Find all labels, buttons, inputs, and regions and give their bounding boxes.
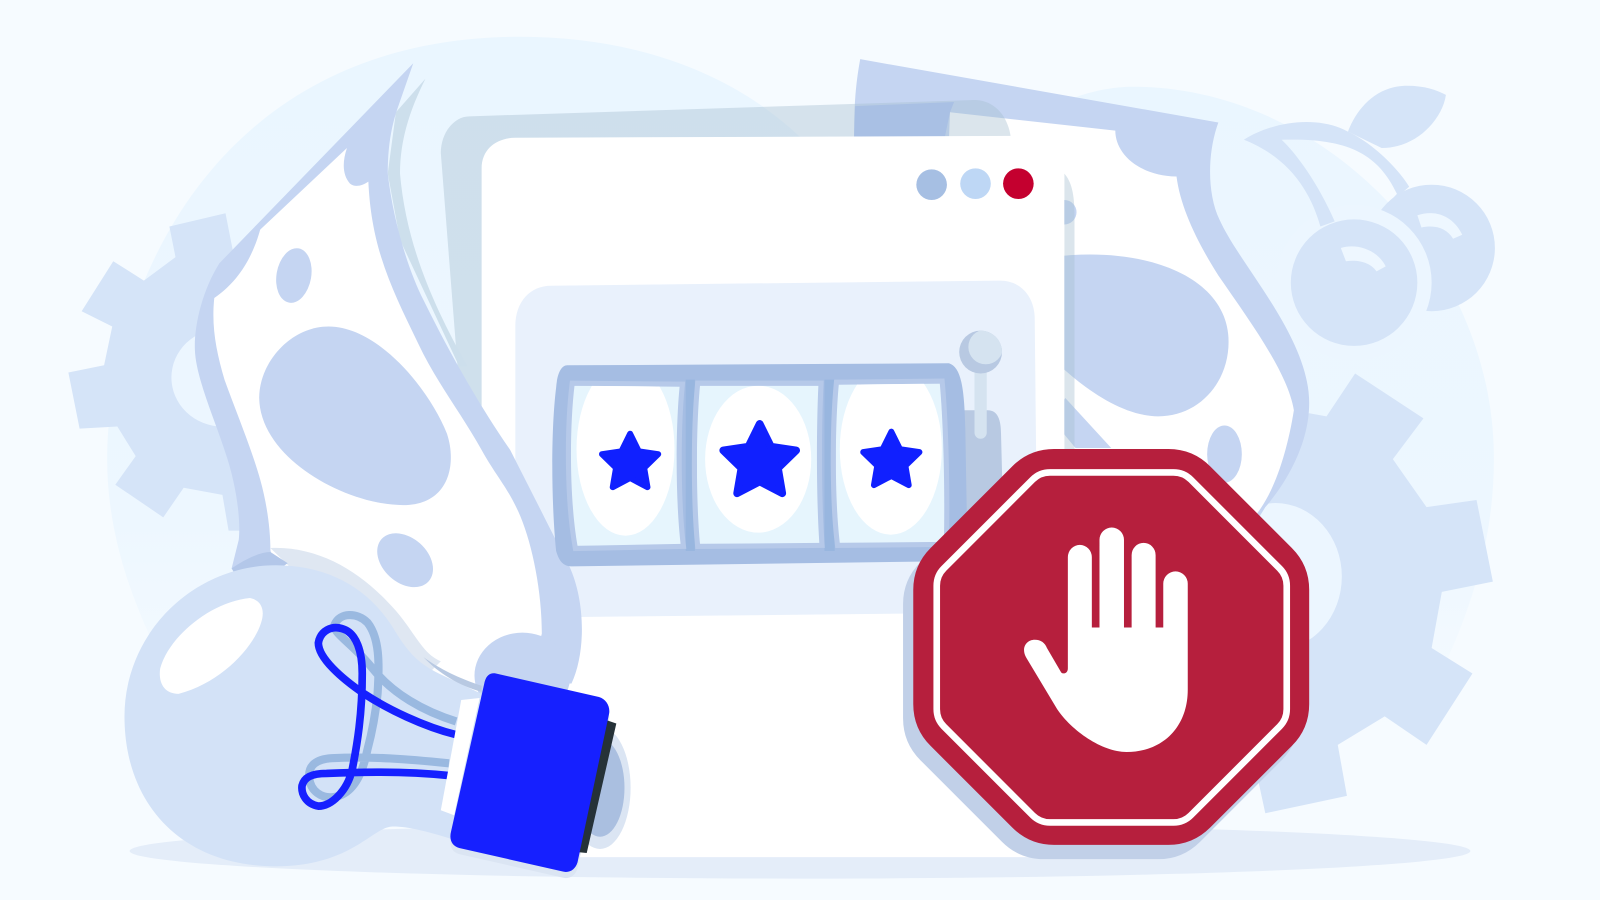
light bulb shape xyxy=(124,548,631,866)
icon: hand xyxy=(1024,528,1188,752)
browser window xyxy=(482,136,1064,857)
reel 3 xyxy=(836,384,944,543)
reel 1 xyxy=(571,386,680,546)
slot machine lever xyxy=(959,330,1002,512)
left banknote spike shadow xyxy=(388,79,467,366)
paperclip wire shadow xyxy=(309,615,456,797)
reel 2 xyxy=(697,386,820,544)
star 2 xyxy=(723,424,796,493)
icon: right gear xyxy=(1173,373,1493,813)
paperclip wire xyxy=(302,628,456,806)
window shadow xyxy=(441,100,1074,459)
left banknote xyxy=(195,63,582,718)
slot machine panel xyxy=(515,281,1038,617)
star 3 xyxy=(863,432,919,485)
ground shadow xyxy=(130,823,1470,879)
window shadow over banknote xyxy=(854,102,954,137)
binder clip xyxy=(441,673,616,878)
stop sign xyxy=(913,449,1309,845)
icon: cherries xyxy=(1244,86,1495,360)
window control dots xyxy=(916,168,1034,200)
stop sign shadow xyxy=(903,463,1299,859)
icon: left gear xyxy=(68,213,273,531)
slot machine reels frame xyxy=(552,362,967,566)
background blob xyxy=(107,37,1494,735)
star 1 xyxy=(602,434,658,487)
right banknote xyxy=(854,59,1309,531)
